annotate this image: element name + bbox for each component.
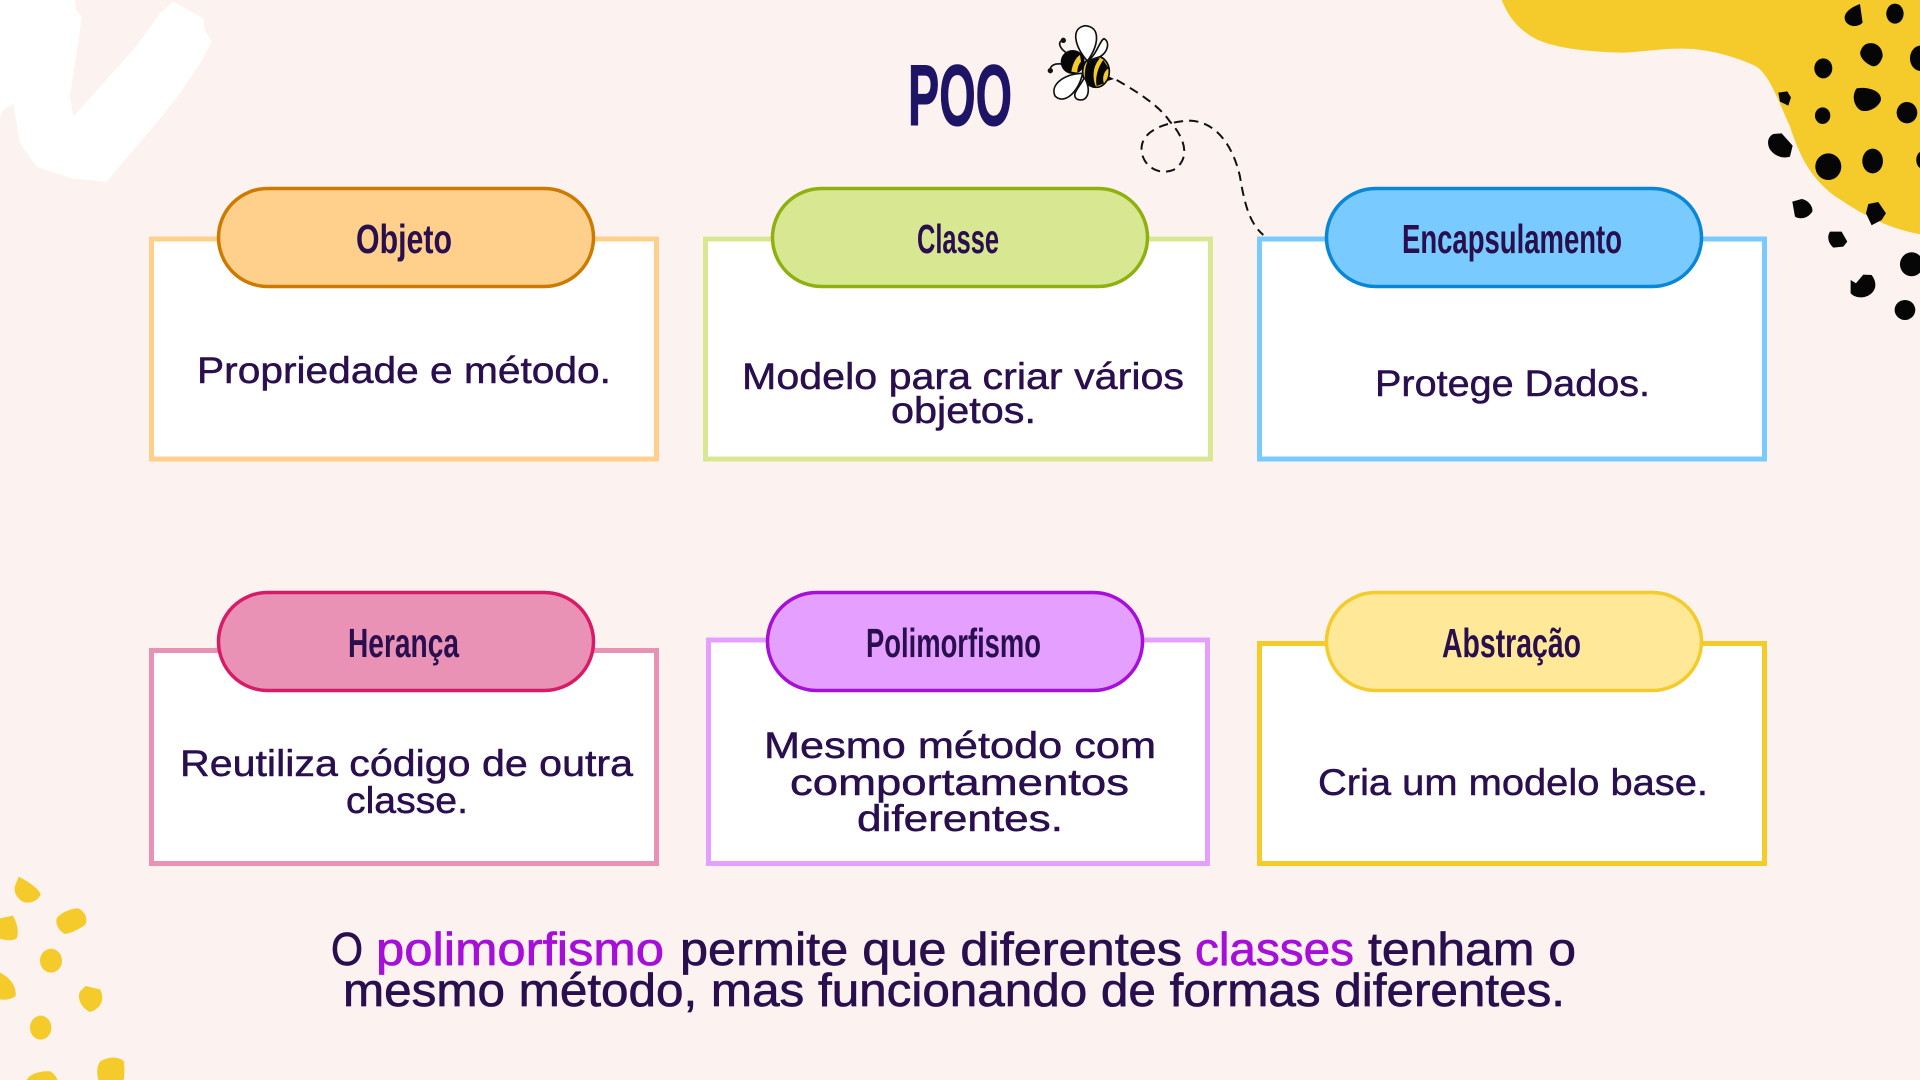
panel: Polimorfismo [708,592,1208,864]
decoration: yellow dots bottom left [0,877,124,1080]
text: Encapsulamento description: Protege Dados. [1375,363,1650,404]
pill: Polimorfismo: Polimorfismo [866,620,1041,666]
decoration: yellow blob with black dots [1502,0,1920,320]
text: Herança description: classe. [346,780,468,821]
pill: Classe: Classe [917,216,999,262]
text: Abstração description: Cria um modelo base. [1318,762,1708,803]
pill: Abstração: Abstração [1442,620,1581,666]
panel: Herança [152,592,656,864]
pill: Abstração [1326,592,1702,690]
panel: Objeto [152,188,656,459]
decoration: white brush check mark [0,0,212,182]
footer statement: mesmo método, mas funcionando de formas diferentes. [343,964,1565,1016]
panel: Classe [706,188,1210,459]
footer statement: tenham o [1368,923,1576,975]
text: Classe description: Modelo para criar vários [742,356,1184,397]
footer statement: polimorfismo [376,923,664,975]
text: Herança description [180,743,633,821]
pill: Encapsulamento: Encapsulamento [1402,216,1622,262]
text: Classe description [742,356,1184,431]
icon: bee with dashed flight path [1048,26,1263,235]
text: Polimorfismo description: diferentes. [857,798,1063,839]
footer statement: classes [1195,923,1354,975]
panel: Encapsulamento [1260,188,1764,459]
pill: Encapsulamento [1326,188,1702,286]
title: POO [908,48,1012,144]
footer statement: O [331,923,363,975]
panel: Abstração [1260,592,1764,864]
text: Classe description: objetos. [891,390,1036,431]
pill: Objeto [218,188,594,286]
text: Polimorfismo description: Mesmo método com [764,725,1156,766]
pill: Herança: Herança [348,620,460,666]
pill: Classe [772,188,1148,286]
footer statement [331,923,1576,1016]
pill: Polimorfismo [768,592,1142,690]
text: Polimorfismo description [764,725,1156,839]
text: Objeto description: Propriedade e método. [197,350,611,391]
pill: Objeto: Objeto [356,216,452,262]
pill: Herança [218,592,594,690]
footer statement: permite que diferentes [680,923,1182,975]
text: Polimorfismo description: comportamentos [790,762,1129,803]
text: Herança description: Reutiliza código de outra [180,743,633,784]
